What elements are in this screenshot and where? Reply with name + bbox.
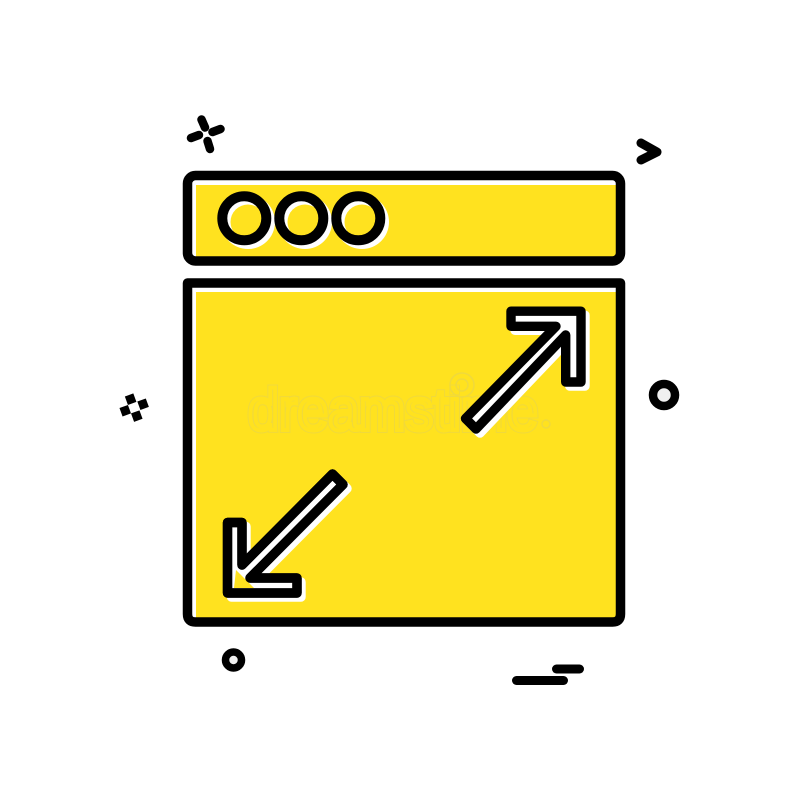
icon: sparkle [191,120,220,149]
panel: browser title bar [188,176,620,261]
icon: arrow pointing down-left [228,474,347,597]
icon: dashes [516,669,580,680]
icon: ring right [653,384,675,406]
watermark: dreamstime [248,378,538,443]
icon: chevron [641,143,657,160]
icon: arrow pointing up-right [466,311,585,433]
icon: checker diamond [116,390,152,425]
panel: browser main window [188,283,620,622]
window control buttons [221,195,389,249]
watermark: dreamstime [248,378,538,443]
icon: ring bottom [226,652,242,668]
